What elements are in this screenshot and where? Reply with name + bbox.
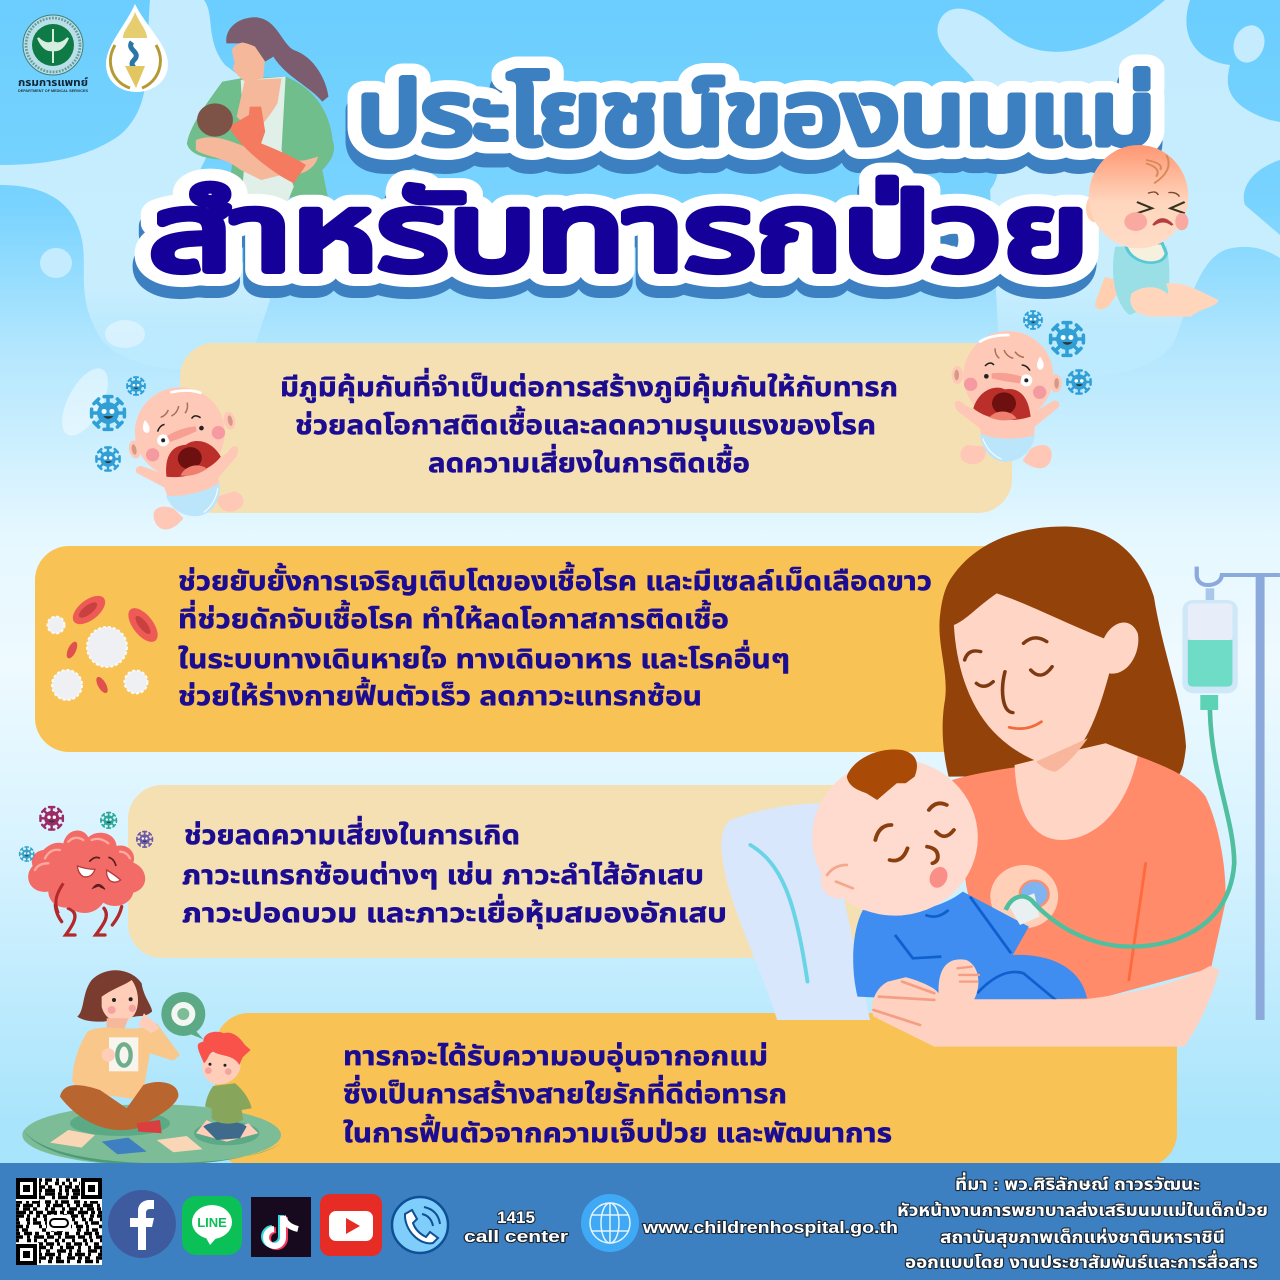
illustration: mother — [939, 527, 1226, 1002]
text: website: www.childrenhospital.go.th — [642, 1218, 898, 1237]
illustration: mother's arm and hand — [872, 959, 1219, 1047]
text: source credit: สถาบันสุขภาพเด็กแห่งชาติมหาราชินี — [940, 1227, 1225, 1248]
text: call center — [464, 1208, 568, 1246]
text: immunity benefit: มีภูมิคุ้มกันที่จำเป็นต่อการสร้างภูมิคุ้มกันให้กับทารก — [280, 368, 898, 403]
text: immunity benefit — [280, 368, 898, 478]
text: infection defence benefit: ในระบบทางเดินหายใจ ทางเดินอาหาร และโรคอื่นๆ — [178, 640, 790, 674]
illustration: feeding tube — [1006, 710, 1234, 947]
panel: immunity — [180, 343, 1012, 513]
text: infection defence benefit: ที่ช่วยดักจับเชื้อโรค ทำให้ลดโอกาสการติดเชื้อ — [178, 600, 729, 634]
illustration: mother teaching child — [22, 970, 281, 1166]
text: infection defence benefit: ช่วยให้ร่างกายฟื้นตัวเร็ว ลดภาวะแทรกซ้อน — [178, 677, 702, 711]
text: source credit: ที่มา : พว.ศิริลักษณ์ ถาวรวัฒนะ — [955, 1172, 1200, 1194]
text: source credit — [897, 1172, 1268, 1272]
logo: ministry of public health: กรมการแพทย์ — [18, 77, 88, 89]
text: immunity benefit: ช่วยลดโอกาสติดเชื้อและลดความรุนแรงของโรค — [295, 406, 876, 441]
icon: globe — [581, 1194, 639, 1252]
text: bonding benefit: ทารกจะได้รับความอบอุ่นจากอกแม่ — [343, 1041, 768, 1072]
illustration: breastfeeding mother — [187, 17, 334, 207]
illustration: sick baby body — [1095, 242, 1219, 317]
text: bonding benefit: ในการฟื้นตัวจากความเจ็บป่วย และพัฒนาการ — [343, 1114, 892, 1148]
panel: bonding — [215, 1013, 1177, 1167]
title line 2: สำหรับทารกป่วย — [149, 172, 1089, 293]
text: complications benefit: ภาวะแทรกซ้อนต่างๆ เช่น ภาวะลำไส้อักเสบ — [182, 860, 704, 890]
icon: phone — [392, 1197, 448, 1253]
text: immunity benefit: ลดความเสี่ยงในการติดเชื้อ — [428, 444, 750, 478]
logo: ministry of public health: DEPARTMENT OF MEDICAL SERVICES — [18, 88, 88, 93]
text: infection defence benefit: ช่วยยับยั้งการเจริญเติบโตของเชื้อโรค และมีเซลล์เม็ดเลือดขาว — [178, 562, 932, 596]
text: complications benefit — [182, 816, 727, 929]
logo: hospital drop — [106, 4, 168, 92]
illustration: IV pole — [1182, 567, 1280, 1020]
title line 1: ประโยชน์ของนมแม่ — [357, 64, 1155, 163]
QR code — [16, 1178, 102, 1265]
text: call center: 1415 — [497, 1208, 535, 1227]
text: infection defence benefit — [178, 562, 932, 711]
illustration: baby — [812, 749, 1087, 1002]
illustration: pillow — [721, 803, 870, 1020]
illustration: crying baby with viruses, right — [952, 311, 1091, 468]
panel: complications — [128, 785, 888, 958]
text: bonding benefit — [343, 1041, 892, 1148]
footer bar — [0, 1163, 1280, 1280]
title line 2 — [147, 172, 1089, 305]
title line 1: ประโยชน์ของนมแม่ — [357, 64, 1155, 163]
illustration: mother holding baby with IV — [721, 527, 1280, 1047]
illustration: crying baby with viruses, left — [92, 377, 254, 534]
title line 1: ประโยชน์ของนมแม่ — [355, 78, 1153, 177]
icon: tiktok — [251, 1197, 311, 1257]
text: complications benefit: ภาวะปอดบวม และภาวะเยื่อหุ้มสมองอักเสบ — [182, 894, 727, 929]
icon: youtube — [320, 1194, 382, 1256]
text: call center: call center — [464, 1227, 568, 1246]
title line 2: สำหรับทารกป่วย — [149, 172, 1089, 293]
icon: line — [182, 1196, 242, 1255]
text: source credit: ออกแบบโดย งานประชาสัมพันธ์และการสื่อสาร — [905, 1250, 1258, 1272]
illustration: sick brain with viruses — [20, 807, 152, 935]
icon: line: LINE — [197, 1215, 227, 1230]
text: complications benefit: ช่วยลดความเสี่ยงในการเกิด — [184, 816, 520, 850]
illustration: sick baby head over title — [1086, 145, 1188, 248]
icon: blood cells — [48, 590, 163, 700]
logo: ministry of public health — [18, 15, 88, 93]
text: bonding benefit: ซึ่งเป็นการสร้างสายใยรักที่ดีต่อทารก — [343, 1075, 787, 1109]
text: source credit: หัวหน้างานการพยาบาลส่งเสริมนมแม่ในเด็กป่วย — [897, 1200, 1268, 1220]
title line 2: สำหรับทารกป่วย — [147, 184, 1087, 305]
icon: facebook — [108, 1190, 176, 1258]
panel: infection defence — [35, 546, 1020, 752]
